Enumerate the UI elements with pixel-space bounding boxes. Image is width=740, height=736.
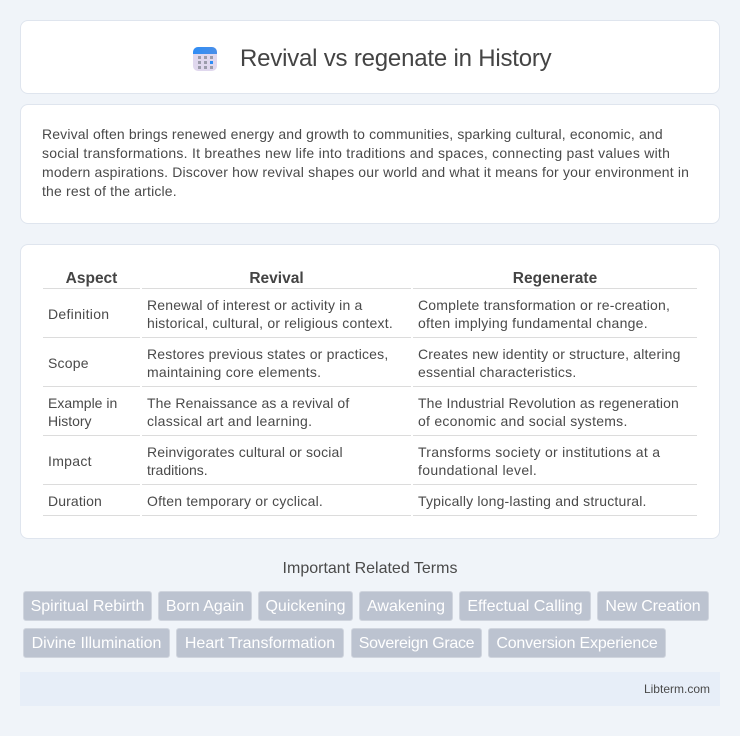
comparison table panel: Often temporary or cyclical. bbox=[147, 493, 323, 509]
footer bar bbox=[20, 672, 720, 706]
comparison table panel: The Renaissance as a revival of bbox=[147, 395, 349, 411]
table header: Aspect bbox=[66, 270, 117, 287]
related terms tags: Spiritual Rebirth bbox=[31, 598, 144, 615]
related terms tags: Awakening bbox=[367, 598, 445, 615]
comparison table panel: foundational level. bbox=[418, 462, 537, 478]
row: definition: Definition bbox=[48, 306, 109, 322]
comparison table panel: Reinvigorates cultural or social bbox=[147, 444, 343, 460]
comparison table panel: Transforms society or institutions at a bbox=[418, 444, 660, 460]
comparison table panel: Renewal of interest or activity in a bbox=[147, 297, 362, 313]
related terms tags bbox=[23, 591, 709, 658]
comparison table panel: The Industrial Revolution as regeneration bbox=[418, 395, 679, 411]
title: Revival vs regenate in History bbox=[240, 45, 551, 72]
related terms tags: Effectual Calling bbox=[467, 598, 583, 615]
related terms tags: Divine Illumination bbox=[32, 635, 161, 652]
comparison table panel: History bbox=[48, 413, 92, 429]
intro text panel: social transformations. It breathes new life into traditions and spaces, connecting past values with bbox=[42, 145, 670, 161]
comparison table panel: Revival bbox=[249, 270, 304, 287]
comparison table panel: Regenerate bbox=[513, 270, 597, 287]
comparison table panel: essential characteristics. bbox=[418, 364, 576, 380]
comparison table panel: traditions. bbox=[147, 462, 208, 478]
intro text panel: the rest of the article. bbox=[42, 183, 177, 199]
comparison table panel: Creates new identity or structure, altering bbox=[418, 346, 681, 362]
related terms tags: Born Again bbox=[166, 598, 244, 615]
row: impact: Impact bbox=[48, 453, 92, 469]
related terms tags: New Creation bbox=[605, 598, 701, 615]
intro text panel: modern aspirations. Discover how revival shapes our world and what it means for your environment in bbox=[42, 164, 689, 180]
comparison table panel: maintaining core elements. bbox=[147, 364, 321, 380]
header card bbox=[20, 20, 720, 94]
related terms tags: Quickening bbox=[265, 598, 346, 615]
related terms tags: Heart Transformation bbox=[185, 635, 335, 652]
intro text panel: Revival often brings renewed energy and growth to communities, sparking cultural, economic, and bbox=[42, 126, 663, 142]
comparison table panel: of economic and social systems. bbox=[418, 413, 628, 429]
related terms tags: Conversion Experience bbox=[496, 635, 658, 652]
related terms heading: Important Related Terms bbox=[283, 560, 457, 577]
comparison table panel: Complete transformation or re-creation, bbox=[418, 297, 670, 313]
icon: calendar bbox=[193, 47, 217, 71]
comparison table panel: historical, cultural, or religious context. bbox=[147, 315, 393, 331]
intro text panel bbox=[20, 104, 720, 224]
comparison table panel: Typically long-lasting and structural. bbox=[418, 493, 647, 509]
comparison table panel: classical art and learning. bbox=[147, 413, 312, 429]
comparison table panel: Restores previous states or practices, bbox=[147, 346, 388, 362]
comparison table panel bbox=[20, 244, 720, 539]
row: scope: Scope bbox=[48, 355, 89, 371]
related terms tags: Sovereign Grace bbox=[359, 635, 474, 652]
footer credit: Libterm.com bbox=[644, 682, 710, 696]
comparison table panel: often implying fundamental change. bbox=[418, 315, 648, 331]
row: example in history: Example in bbox=[48, 395, 117, 411]
row: duration: Duration bbox=[48, 493, 102, 509]
